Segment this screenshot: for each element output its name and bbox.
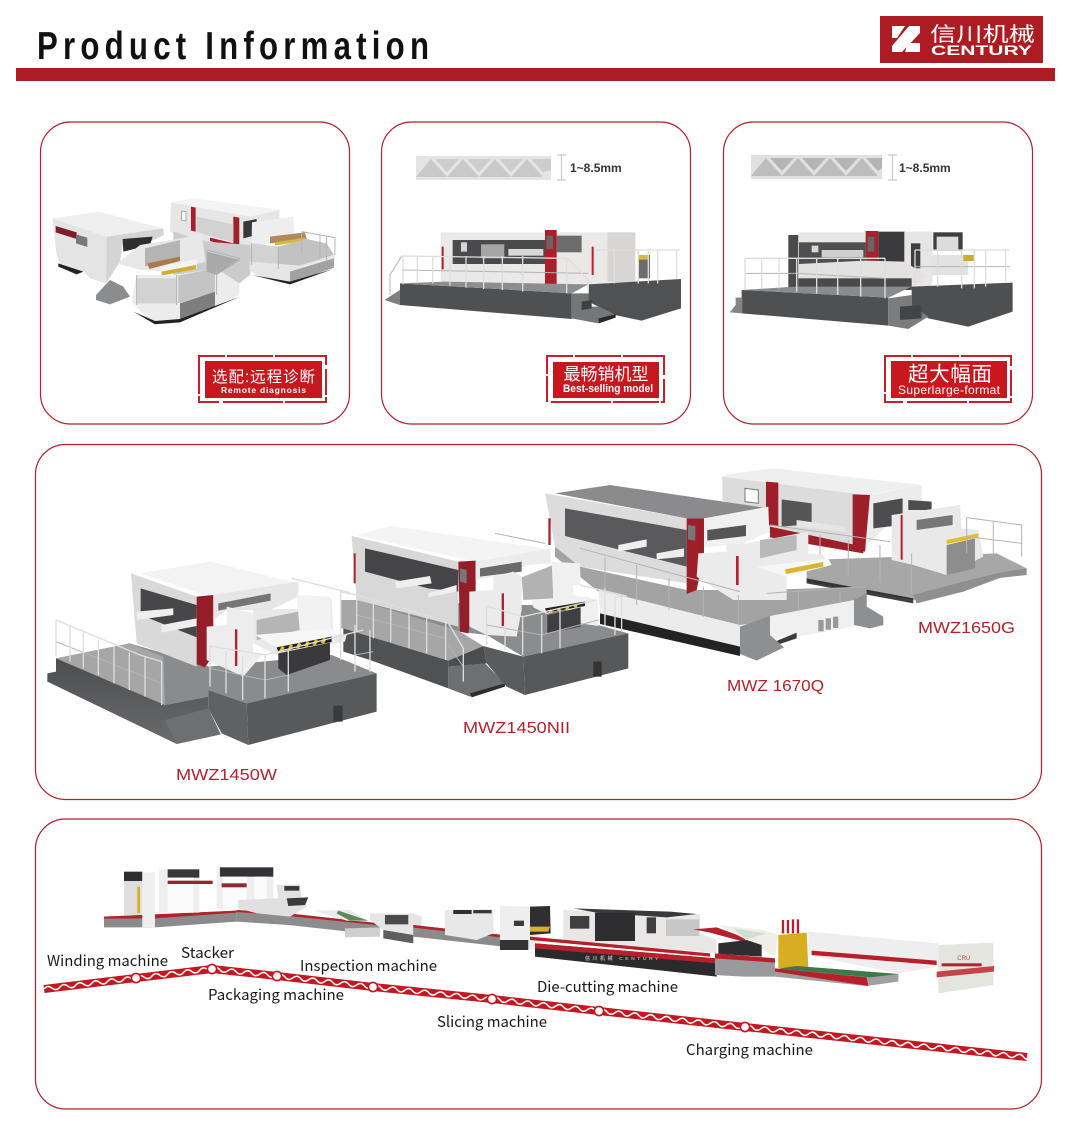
machine: MWZ1450W [47,562,377,745]
panel: remote diagnosis [40,122,350,424]
logo [880,16,1043,63]
label: stacker: Stacker [181,942,234,963]
badge: best-selling model: 最畅销机型 [564,365,648,384]
panel: superlarge format [724,122,1032,424]
logo: CENTURY [931,43,1032,58]
badge: best-selling model [547,356,664,402]
process line [44,964,1028,1059]
panel border [36,444,1042,800]
label: die-cutting machine: Die-cutting machine [537,976,678,997]
corrugated board diagram: 1~8.5mm [899,161,951,175]
corrugated board diagram [416,155,622,180]
panel border [36,819,1042,1109]
header bar [16,68,1055,81]
label: MWZ1650G: MWZ1650G [918,620,1015,637]
machine pair illustration [53,198,335,324]
badge: remote diagnosis: 选配:远程诊断 [212,368,315,386]
panel border [382,122,690,424]
machine: MWZ1650G [722,468,1027,603]
label: inspection machine: Inspection machine [300,955,437,976]
badge: superlarge format: Superlarge-format [898,383,1001,397]
die-cutting section: 信川机械 CENTURY [585,955,659,962]
machine: MWZ1450NII [340,526,628,697]
machine illustration [730,231,1013,329]
panel: best-selling model [382,122,690,424]
production line illustration [104,867,994,993]
title: Product Information [37,25,429,68]
badge: superlarge format [885,356,1011,402]
corrugated board diagram [751,155,951,180]
machine illustration [384,230,681,323]
corrugated board diagram: 1~8.5mm [570,161,622,175]
badge: best-selling model: Best-selling model [563,383,653,395]
badge: remote diagnosis [199,356,326,402]
label: packaging machine: Packaging machine [208,984,344,1005]
left section [104,867,540,950]
badge: remote diagnosis: Remote diagnosis [221,385,306,395]
logo: 信川机械 [930,23,1035,46]
label: MWZ1450NII: MWZ1450NII [463,720,570,737]
panel border [40,122,350,424]
machine: MWZ1670Q [545,485,883,661]
label: winding machine: Winding machine [47,950,168,971]
die-cutting section: CRU [957,956,970,962]
label: MWZ1450W: MWZ1450W [176,767,278,784]
label: slicing machine: Slicing machine [437,1011,547,1032]
panel: machine models [36,444,1042,800]
badge: superlarge format: 超大幅面 [908,363,992,386]
panel: production line [36,819,1042,1109]
die-cutting section [530,906,994,993]
label: charging machine: Charging machine [686,1039,813,1060]
label: MWZ 1670Q: MWZ 1670Q [727,678,824,695]
panel border [724,122,1032,424]
header [16,16,1055,81]
